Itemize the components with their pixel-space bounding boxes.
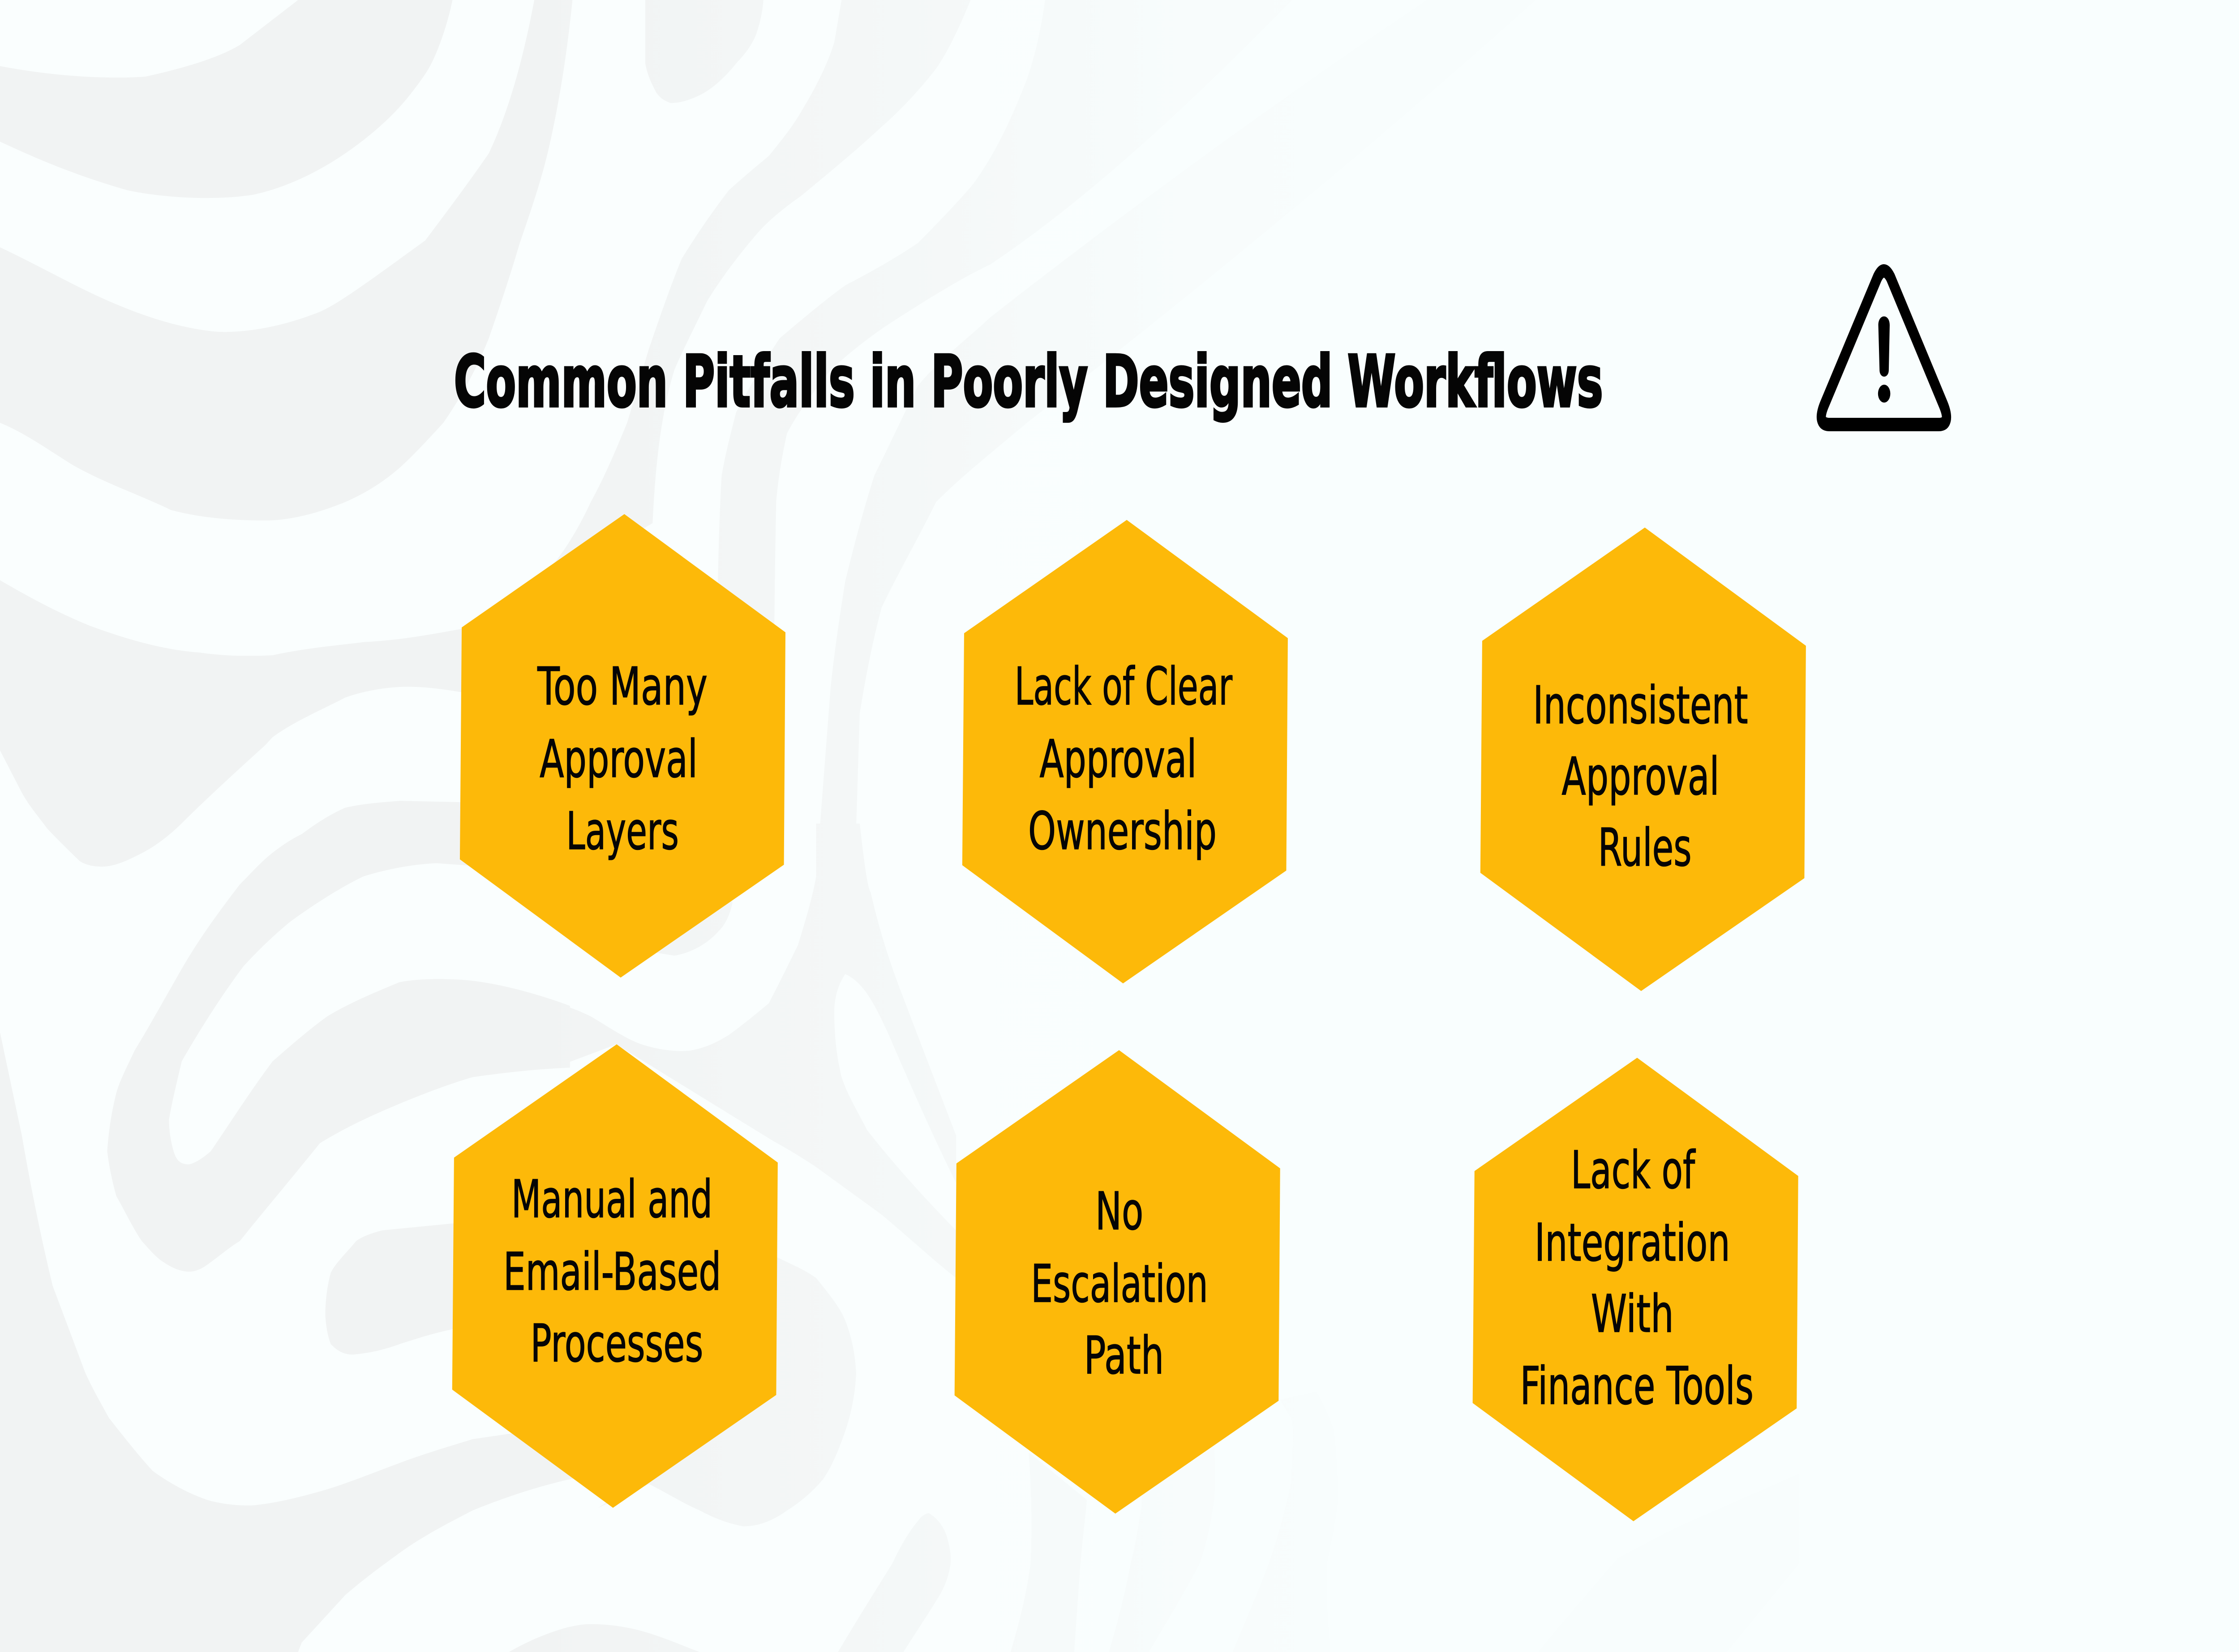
hexagon: Lack of Clear Approval Ownership: Ownership — [1028, 802, 1217, 862]
hexagon: Inconsistent Approval Rules: Rules — [1598, 818, 1692, 878]
hexagon: Manual and Email-Based Processes: Manual and — [511, 1170, 712, 1230]
hexagon: Inconsistent Approval Rules: Approval — [1561, 747, 1720, 807]
hexagon: Lack of Integration With Finance Tools — [1473, 1058, 1798, 1521]
hexagon: No Escalation Path: Path — [1084, 1326, 1164, 1386]
hexagon: Lack of Integration With Finance Tools: With — [1591, 1284, 1674, 1344]
hexagon: Lack of Integration With Finance Tools: Integration — [1535, 1213, 1730, 1273]
hexagon: Manual and Email-Based Processes: Email-Based — [503, 1242, 721, 1302]
icon: warning triangle — [1821, 271, 1947, 425]
hexagon: No Escalation Path: Escalation — [1031, 1254, 1208, 1314]
hexagon: Lack of Integration With Finance Tools: Finance Tools — [1520, 1356, 1754, 1416]
hexagon: No Escalation Path — [955, 1050, 1280, 1514]
hexagon: Lack of Clear Approval Ownership: Lack of Clear — [1015, 657, 1232, 717]
hexagon: Lack of Integration With Finance Tools: Lack of — [1571, 1141, 1696, 1201]
hexagon: Manual and Email-Based Processes — [452, 1044, 778, 1508]
hexagon: No Escalation Path: No — [1095, 1182, 1143, 1242]
hexagon: Manual and Email-Based Processes: Processes — [530, 1314, 703, 1374]
hexagon: Too Many Approval Layers: Approval — [540, 729, 698, 790]
hexagon: Too Many Approval Layers: Layers — [566, 802, 679, 862]
hexagon: Too Many Approval Layers — [460, 514, 785, 978]
hexagon: Lack of Clear Approval Ownership — [962, 520, 1288, 983]
hexagon: Inconsistent Approval Rules: Inconsistent — [1533, 676, 1748, 736]
hexagon: Too Many Approval Layers: Too Many — [537, 657, 708, 717]
hexagon: Lack of Clear Approval Ownership: Approval — [1040, 729, 1197, 790]
hexagon: Inconsistent Approval Rules — [1480, 528, 1806, 991]
title: Common Pitfalls in Poorly Designed Workflows — [454, 340, 1603, 423]
